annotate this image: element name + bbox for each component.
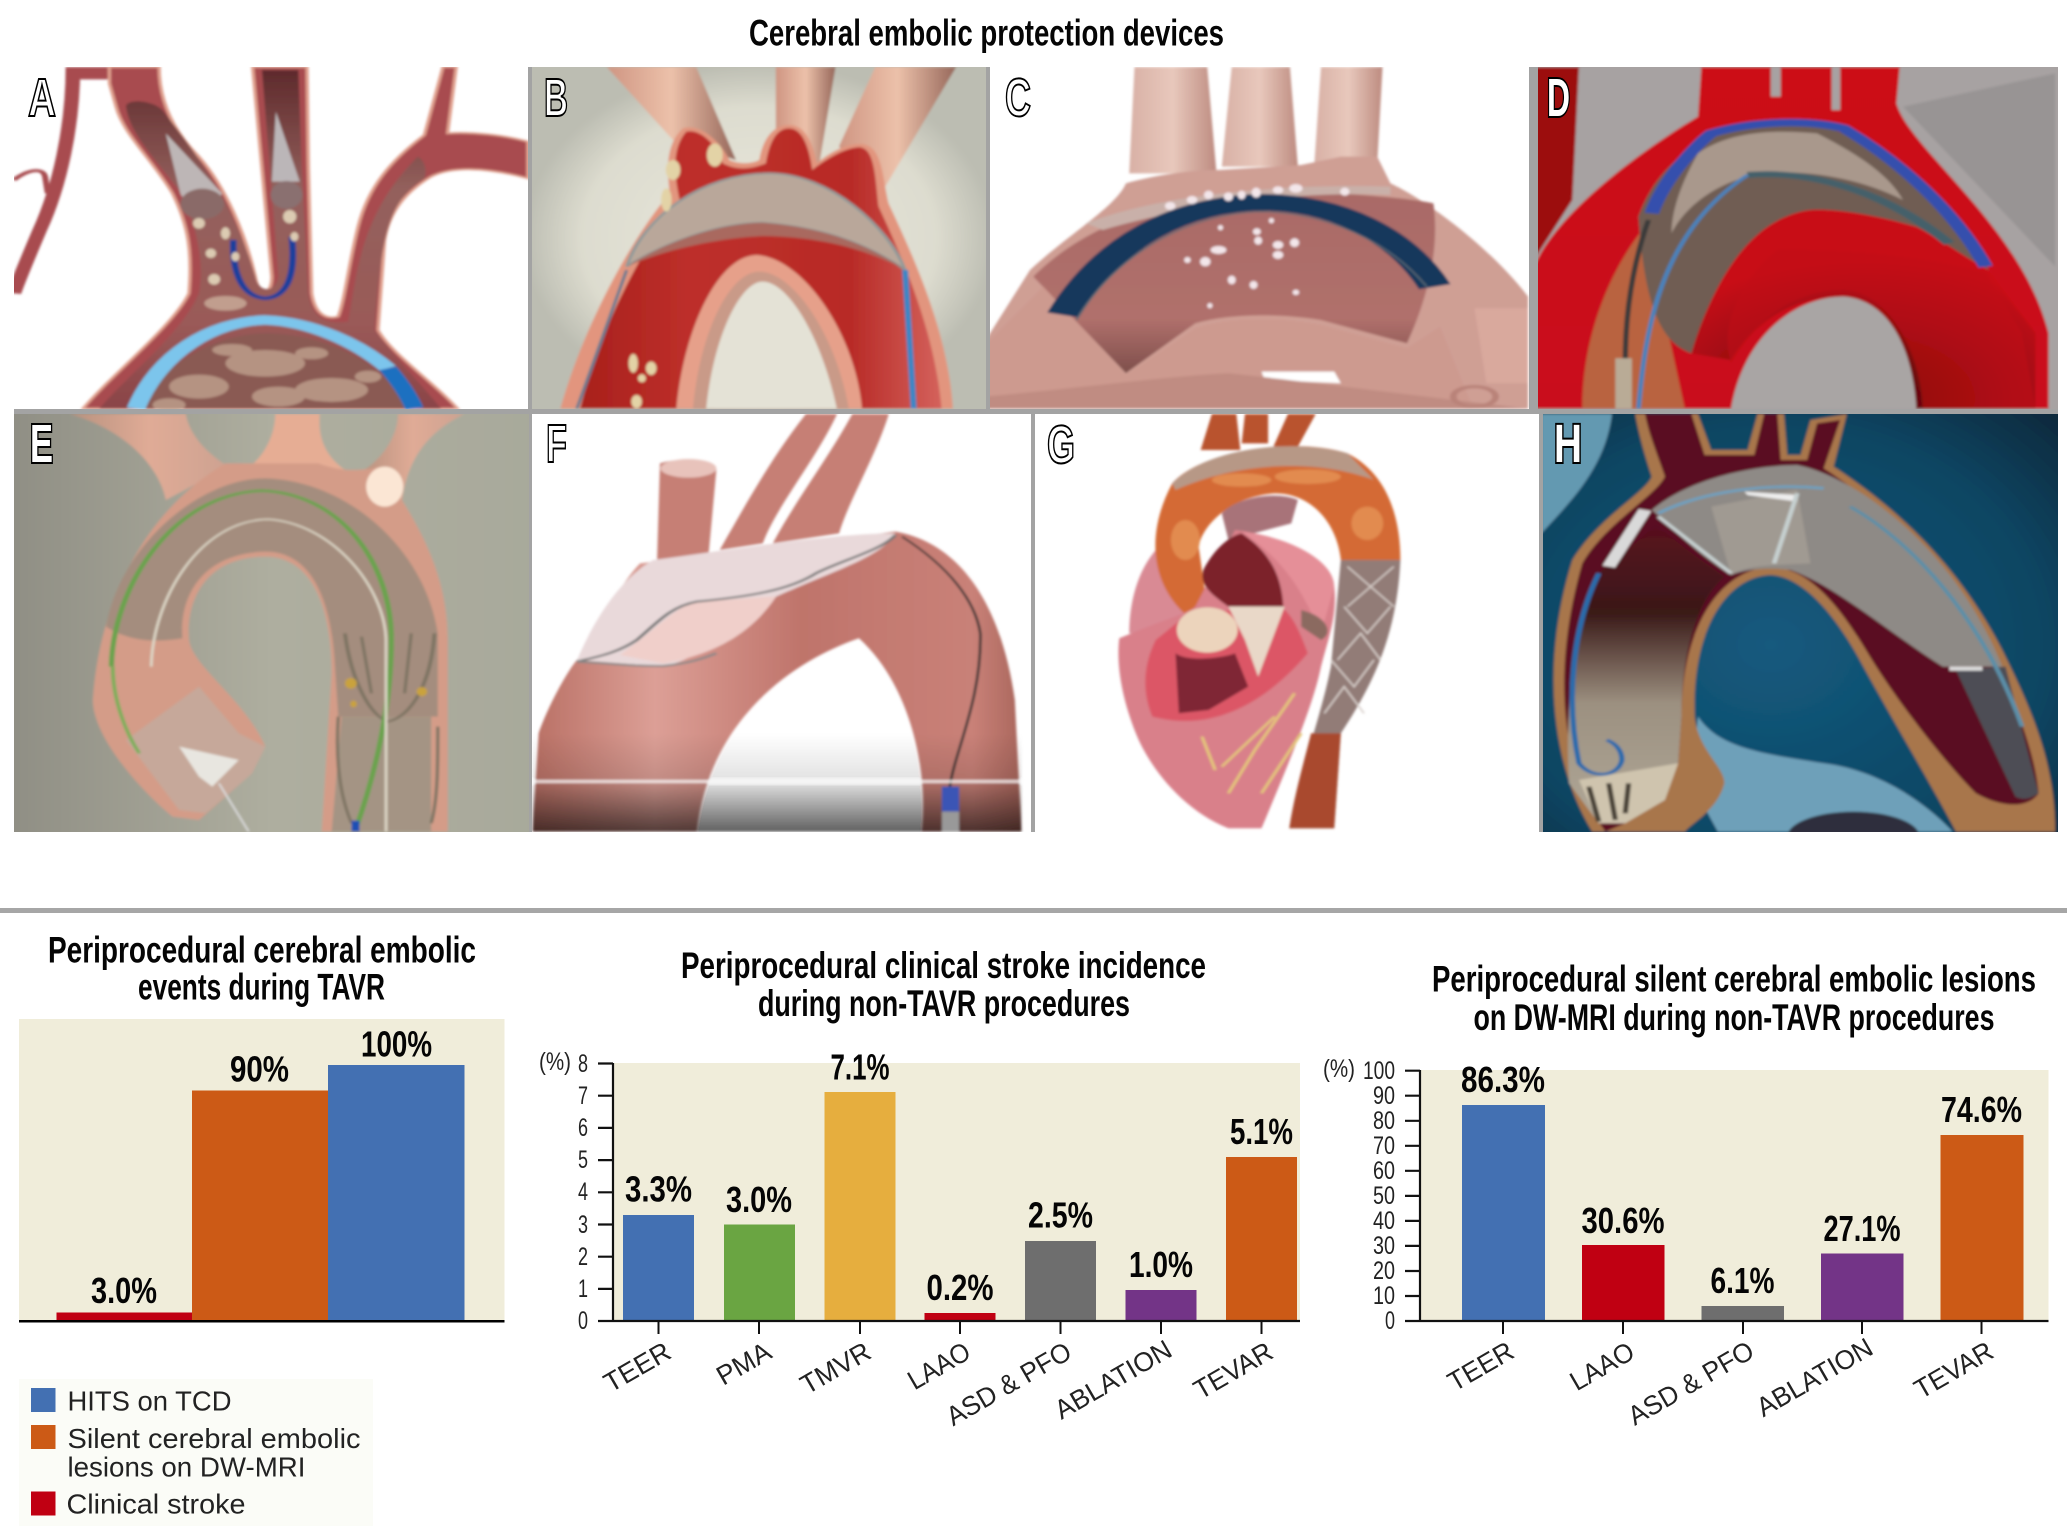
value labels: 2.5% — [1028, 1194, 1093, 1236]
y axis: 90 — [1373, 1082, 1395, 1110]
label D: D — [1547, 68, 1570, 128]
panel H: dark-teal arch with filter — [1533, 410, 2062, 862]
value labels: 7.1% — [830, 1046, 890, 1088]
section divider — [0, 908, 2067, 913]
y axis: (%) — [1323, 1055, 1355, 1083]
value labels: 27.1% — [1824, 1208, 1900, 1249]
chart: periprocedural clinical stroke incidence — [539, 945, 1300, 1432]
illustration: translucent arch and valve — [7, 410, 537, 837]
y axis: 7 — [578, 1082, 588, 1110]
bars — [56, 1065, 464, 1321]
y axis — [539, 1048, 1300, 1335]
y axis: 4 — [578, 1178, 588, 1206]
y axis: 50 — [1373, 1182, 1395, 1210]
x axis ticks and category labels: ABLATION — [1751, 1332, 1878, 1423]
illustration: heart, arch and stent — [1118, 414, 1400, 828]
title: cerebral embolic protection devices: Cerebral embolic protection devices — [749, 12, 1224, 54]
legend — [19, 1379, 373, 1526]
plot background — [1420, 1070, 2048, 1321]
y axis: 10 — [1373, 1282, 1395, 1310]
illustration: red arch with mesh dome — [524, 63, 995, 413]
y axis: 1 — [578, 1275, 588, 1303]
x axis ticks and category labels: ASD & PFO — [941, 1336, 1076, 1432]
y axis: 0 — [578, 1307, 588, 1335]
legend item: silent lesions — [31, 1423, 360, 1482]
chart: periprocedural silent cerebral embolic lesions — [1323, 958, 2048, 1431]
plot background — [19, 1019, 504, 1321]
value labels — [1461, 1059, 2022, 1301]
panel E: translucent arch with green wire — [7, 410, 537, 837]
legend item: silent lesions: lesions on DW-MRI — [68, 1452, 306, 1482]
panel D: deflector device in red arch — [1526, 63, 2067, 413]
x axis ticks and category labels — [1443, 1321, 1998, 1431]
panel F: arch deflector sheet — [532, 414, 1031, 832]
value labels: 86.3% — [1461, 1059, 1545, 1100]
x axis ticks and category labels: ABLATION — [1049, 1334, 1177, 1425]
y axis: 5 — [578, 1146, 588, 1174]
y axis: 70 — [1373, 1132, 1395, 1160]
value labels: 3.0% — [726, 1179, 792, 1220]
illustration: dark red arch with device and blue pigtail — [1533, 410, 2062, 862]
x axis ticks and category labels: TMVR — [795, 1336, 876, 1400]
label G: G — [1047, 415, 1075, 475]
value labels: 30.6% — [1582, 1200, 1664, 1241]
value labels: 3.3% — [625, 1168, 692, 1210]
label E: E — [30, 414, 53, 474]
legend item: HITS on TCD: HITS on TCD — [68, 1386, 232, 1416]
panel A: dual filter device — [14, 67, 528, 412]
y axis — [1323, 1055, 2048, 1335]
illustration: pink aorta with white membrane — [533, 414, 1021, 832]
heading — [48, 930, 476, 1008]
chart: periprocedural cerebral embolic events during TAVR — [19, 930, 504, 1322]
heading: Periprocedural cerebral embolic — [48, 930, 476, 970]
label H: H — [1554, 414, 1582, 474]
heading — [681, 945, 1206, 1024]
value labels: 90% — [230, 1048, 289, 1090]
y axis: (%) — [539, 1048, 571, 1076]
panel G: heart with stent graft — [1048, 414, 1402, 830]
value labels: 1.0% — [1129, 1244, 1193, 1285]
legend item: silent lesions: Silent cerebral embolic — [68, 1423, 360, 1454]
label B: B — [544, 68, 568, 128]
baseline — [19, 1320, 504, 1322]
value labels — [91, 1024, 432, 1311]
y axis: 60 — [1373, 1157, 1395, 1185]
heading: events during TAVR — [138, 966, 385, 1008]
plot background — [613, 1063, 1300, 1321]
heading: Periprocedural clinical stroke incidence — [681, 945, 1206, 986]
heading — [1432, 958, 2036, 1038]
label C: C — [1005, 68, 1031, 128]
value labels: 6.1% — [1710, 1260, 1774, 1301]
panel frame: grey separators — [14, 67, 2058, 832]
y axis: 40 — [1373, 1207, 1395, 1235]
y axis: 3 — [578, 1211, 588, 1239]
value labels: 3.0% — [91, 1270, 157, 1311]
x axis ticks and category labels: TEER — [1443, 1336, 1519, 1397]
label A: A — [28, 68, 56, 128]
bars — [1462, 1105, 2024, 1321]
x axis ticks and category labels: TEVAR — [1909, 1336, 1998, 1405]
panel C: arch filter with embolic particles — [984, 67, 1529, 409]
y axis: 2 — [578, 1243, 588, 1271]
heading: during non-TAVR procedures — [758, 983, 1130, 1024]
illustration: arch with filters in carotids — [14, 67, 528, 412]
x axis ticks and category labels: ASD & PFO — [1623, 1335, 1759, 1431]
y axis: 8 — [578, 1050, 588, 1078]
legend item: clinical stroke: Clinical stroke — [66, 1488, 246, 1520]
illustration: red aorta with blue-rimmed filter — [1526, 63, 2067, 413]
x axis ticks and category labels — [599, 1321, 1278, 1432]
value labels: 5.1% — [1230, 1111, 1293, 1152]
illustration: opened arch with navy device — [984, 67, 1528, 409]
value labels: 0.2% — [926, 1267, 994, 1308]
label F: F — [546, 414, 567, 474]
y axis: 0 — [1385, 1307, 1395, 1335]
value labels — [625, 1046, 1293, 1308]
y axis: 80 — [1373, 1107, 1395, 1135]
y axis: 30 — [1373, 1232, 1395, 1260]
y axis: 100 — [1363, 1057, 1395, 1085]
bars — [623, 1092, 1297, 1321]
x axis ticks and category labels: LAAO — [902, 1336, 976, 1396]
panel B: mesh deflector device — [524, 63, 995, 413]
x axis ticks and category labels: LAAO — [1565, 1336, 1640, 1397]
y axis: 6 — [578, 1114, 588, 1142]
y axis: 20 — [1373, 1257, 1395, 1285]
x axis ticks and category labels: PMA — [711, 1336, 776, 1391]
x axis ticks and category labels: TEVAR — [1189, 1336, 1278, 1405]
value labels: 74.6% — [1941, 1089, 2022, 1130]
value labels: 100% — [361, 1024, 432, 1064]
x axis ticks and category labels: TEER — [599, 1336, 676, 1398]
